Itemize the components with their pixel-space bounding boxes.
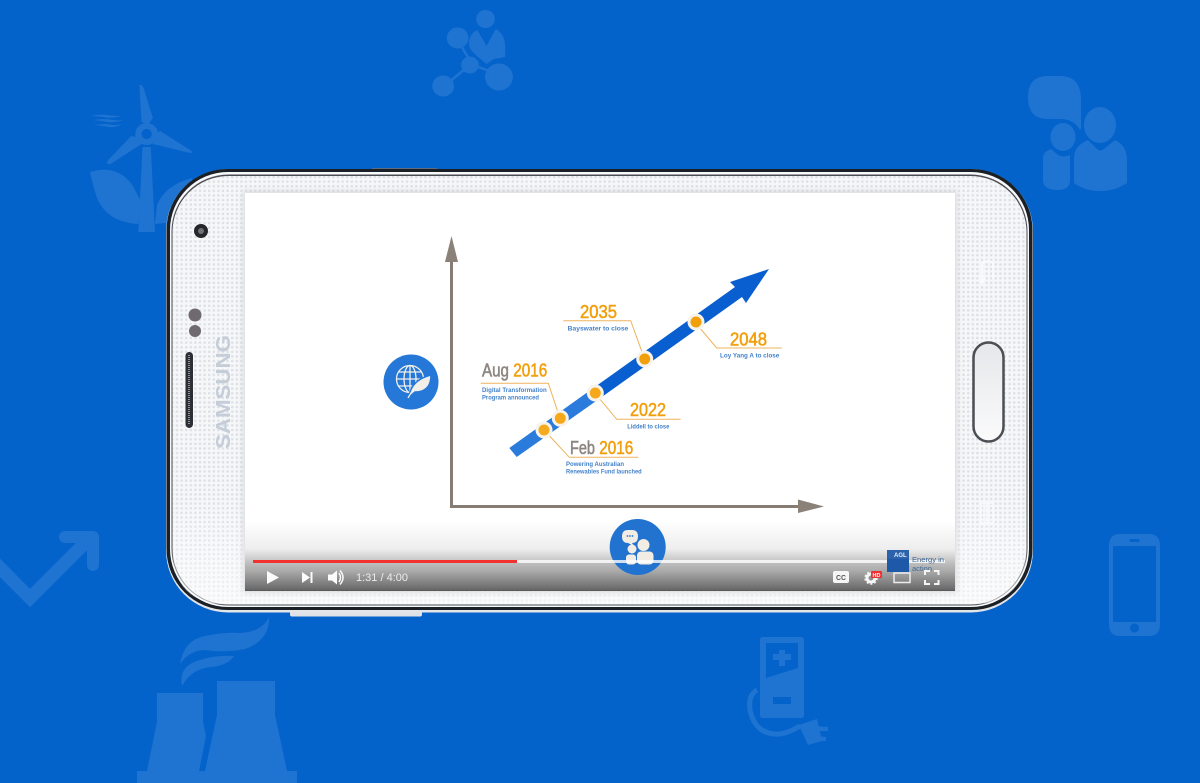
AGL logo: action <box>912 566 932 573</box>
video screen <box>243 191 957 593</box>
brand name: SAMSUNG <box>213 335 235 449</box>
icon: check arrow trend <box>0 537 93 598</box>
icon: battery with plug <box>750 637 828 745</box>
label: Aug 2016: Aug <box>482 361 509 381</box>
label: Feb 2016: Renewables Fund launched <box>566 469 642 476</box>
timeline arrow <box>509 269 769 457</box>
label: Aug 2016: 2016 <box>513 361 547 381</box>
label: 2035 <box>568 302 629 333</box>
AGL logo <box>887 550 944 573</box>
AGL logo: Energy in <box>912 557 944 564</box>
AGL logo: AGL <box>894 553 907 559</box>
icon: power station cooling towers <box>137 617 297 783</box>
progress bar <box>253 560 945 563</box>
icon: wind turbine with leaves <box>90 85 192 232</box>
label: 2048 <box>720 330 780 360</box>
leader lines <box>481 321 782 457</box>
label: Feb 2016: 2016 <box>599 438 633 458</box>
player controls right <box>833 571 938 584</box>
play button <box>267 571 279 584</box>
chart axes <box>445 236 824 513</box>
label: 2035: 2035 <box>580 302 617 322</box>
label: Feb 2016 <box>566 438 642 476</box>
label: Aug 2016: Digital Transformation <box>482 387 547 394</box>
next button <box>302 572 312 583</box>
speaker grille <box>186 352 193 428</box>
label: 2048: Loy Yang A to close <box>720 353 780 360</box>
theater button <box>894 573 910 582</box>
timeline nodes <box>536 314 704 438</box>
player controls left <box>267 570 408 584</box>
label: Feb 2016: Feb <box>570 438 595 458</box>
volume button <box>328 570 343 584</box>
phone side buttons <box>290 168 437 616</box>
icon: network person <box>432 10 513 96</box>
camera <box>194 224 208 238</box>
captions button: CC <box>836 575 846 582</box>
back key ghost icon <box>979 261 993 283</box>
settings HD button: HD <box>872 573 880 579</box>
label: 2035: Bayswater to close <box>568 326 629 333</box>
label: Aug 2016 <box>482 361 547 402</box>
icon: people with speech bubble <box>610 519 666 575</box>
elapsed time: 1:31 / 4:00 <box>356 572 408 584</box>
icon: globe and leaf <box>384 354 438 410</box>
icon: speech bubble and people <box>1028 76 1127 191</box>
label: 2048: 2048 <box>730 330 767 350</box>
label: 2022: Liddell to close <box>627 423 670 430</box>
player control gradient <box>245 521 955 591</box>
label: Feb 2016: Powering Australian <box>566 461 624 468</box>
sensors <box>188 308 202 337</box>
icon: smartphone outline <box>1109 534 1160 636</box>
fullscreen button <box>925 571 938 584</box>
phone body frame <box>166 169 1033 612</box>
label: Aug 2016: Program announced <box>482 395 539 402</box>
home button <box>974 342 1004 442</box>
menu key ghost icon <box>981 503 993 523</box>
phone <box>166 168 1033 616</box>
label: 2022: 2022 <box>630 400 666 420</box>
label: 2022 <box>627 400 670 430</box>
